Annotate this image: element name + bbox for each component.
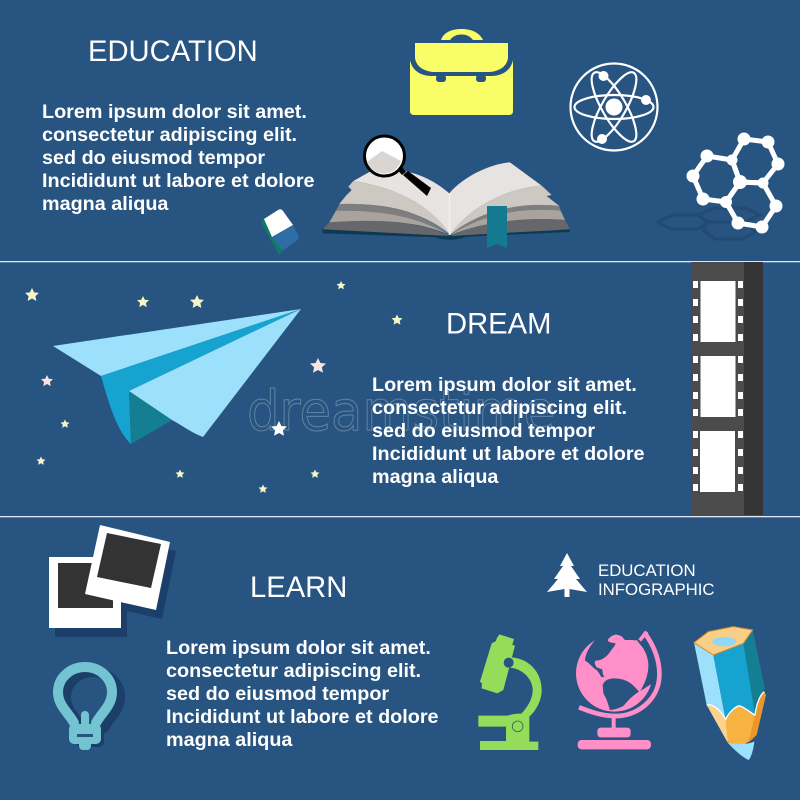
text block: dream: consectetur adipiscing elit. [372, 397, 627, 419]
icon: briefcase [410, 29, 513, 115]
panel: education [42, 29, 784, 255]
icon: bookmark [487, 206, 507, 248]
text block: education [42, 101, 315, 215]
icon: eraser [261, 209, 299, 255]
heading: dream: DREAM [446, 308, 551, 340]
icon: film strip [691, 262, 763, 515]
text block: dream: Lorem ipsum dolor sit amet. [372, 374, 637, 396]
panel: learn [49, 525, 766, 760]
text block: education: consectetur adipiscing elit. [42, 124, 297, 146]
heading: learn: LEARN [250, 572, 347, 604]
icon: molecule shadow [657, 208, 760, 239]
text block: education: magna aliqua [42, 193, 169, 215]
label: education infographic: INFOGRAPHIC [598, 580, 715, 599]
watermark: dreamstime [247, 379, 555, 443]
text block: dream: Incididunt ut labore et dolore [372, 443, 645, 465]
icon: pencil [694, 627, 766, 760]
text block: learn [166, 637, 439, 751]
text block: learn: magna aliqua [166, 729, 293, 751]
icon: tree [547, 553, 587, 597]
icon: paper plane [53, 309, 301, 444]
icon: stars [25, 281, 402, 493]
text block: learn: Lorem ipsum dolor sit amet. [166, 637, 431, 659]
text block: learn: sed do eiusmod tempor [166, 683, 389, 705]
icon: magnifier [364, 136, 431, 196]
panel: dream [25, 262, 763, 515]
label: education infographic [598, 561, 715, 599]
text block: education: Lorem ipsum dolor sit amet. [42, 101, 307, 123]
label: education infographic: EDUCATION [598, 561, 696, 580]
icon: globe [576, 628, 659, 749]
icon: microscope [478, 634, 542, 750]
icon: molecule [686, 132, 784, 234]
icon: light bulb [58, 667, 120, 750]
text block: learn: Incididunt ut labore et dolore [166, 706, 439, 728]
text block: education: Incididunt ut labore et dolore [42, 170, 315, 192]
heading: education: EDUCATION [88, 36, 258, 68]
text block: learn: consectetur adipiscing elit. [166, 660, 421, 682]
icon: atom [570, 64, 658, 150]
text block: education: sed do eiusmod tempor [42, 147, 265, 169]
icon: open book [322, 162, 570, 240]
text block: dream [372, 374, 645, 488]
icon: photos [49, 525, 176, 637]
text block: dream: sed do eiusmod tempor [372, 420, 595, 442]
text block: dream: magna aliqua [372, 466, 499, 488]
